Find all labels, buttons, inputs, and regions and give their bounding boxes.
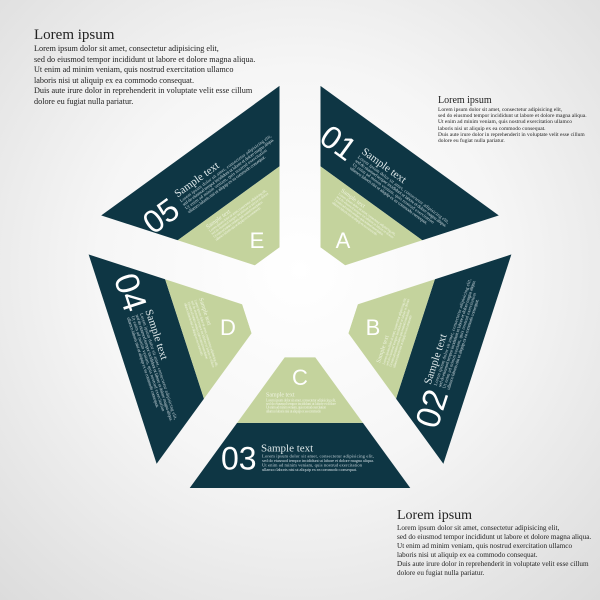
- text block: bottom-right: Lorem ipsum dolor sit amet, consectetur adipisicing elit,: [397, 524, 559, 532]
- text block: bottom-right: Duis aute irure dolor in reprehenderit in voluptate velit esse cillum: [397, 560, 589, 568]
- text block: top-left: Lorem ipsum dolor sit amet, consectetur adipisicing elit,: [34, 44, 219, 53]
- text block: top-right: [438, 95, 587, 144]
- wedge 05: [101, 86, 280, 266]
- wedge 05: Sample text: [172, 160, 222, 200]
- wedge 04: [88, 254, 252, 464]
- wedge 02: Sample text: [376, 335, 391, 364]
- text block: top-right: Ut enim ad minim veniam, quis nostrud exercitation ullamco: [438, 119, 572, 125]
- wedge 02: [348, 254, 512, 464]
- wedge 03: Sample text: [261, 442, 313, 454]
- wedge 02: Sample text: [422, 332, 450, 386]
- wedge 01: [320, 86, 499, 266]
- text block: top-left: sed do eiusmod tempor incididunt ut labore et dolore magna aliqua.: [34, 54, 255, 64]
- text block: bottom-right: [397, 508, 591, 577]
- text block: top-right: laboris nisi ut aliquip ex ea commodo consequat.: [438, 126, 546, 132]
- text block: top-right: dolore eu fugiat nulla pariatur.: [438, 138, 505, 144]
- text block: top-right: Lorem ipsum: [438, 95, 492, 106]
- wedge 05: Sample text: [205, 209, 232, 231]
- text block: bottom-right: Ut enim ad minim veniam, quis nostrud exercitation ullamco: [397, 542, 572, 550]
- wedge 01: A: [336, 228, 351, 253]
- text block: bottom-right: Lorem ipsum: [397, 508, 472, 523]
- text block: top-left: laboris nisi ut aliquip ex ea commodo consequat.: [34, 76, 194, 84]
- text block: top-right: Lorem ipsum dolor sit amet, consectetur adipisicing elit,: [438, 107, 562, 113]
- text block: bottom-right: sed do eiusmod tempor incididunt ut labore et dolore magna aliqua.: [397, 533, 591, 541]
- wedge 01: Sample text: [339, 188, 366, 210]
- wedge 04: 04: [106, 269, 154, 316]
- wedge 03: C: [292, 365, 308, 390]
- pentagon diagram: [88, 86, 512, 488]
- wedge 01: Sample text: [359, 146, 409, 186]
- text block: top-right: Duis aute irure dolor in reprehenderit in voluptate velit esse cillum: [438, 132, 585, 138]
- wedge 02: 02: [408, 385, 456, 433]
- text block: top-left: Ut enim ad minim veniam, quis nostrud exercitation ullamco: [34, 65, 233, 74]
- wedge 03: [190, 357, 410, 488]
- wedge 04: Sample text: [197, 297, 212, 327]
- text block: bottom-right: dolore eu fugiat nulla pariatur.: [397, 569, 484, 577]
- wedge 02: B: [366, 315, 380, 340]
- text block: top-left: Duis aute irure dolor in reprehenderit in voluptate velit esse cillum: [34, 86, 252, 95]
- wedge 01: 01: [313, 118, 363, 168]
- text block: top-left: [34, 27, 255, 106]
- text block: top-left: dolore eu fugiat nulla pariatur.: [34, 96, 133, 106]
- wedge 03: Sample text: [266, 392, 295, 398]
- text block: top-left: Lorem ipsum: [34, 27, 114, 43]
- text block: top-right: sed do eiusmod tempor incididunt ut labore et dolore magna aliqua.: [438, 113, 587, 119]
- wedge 05: 05: [136, 191, 186, 241]
- text block: bottom-right: laboris nisi ut aliquip ex ea commodo consequat.: [397, 551, 538, 559]
- wedge 03: 03: [221, 440, 257, 476]
- wedge 04: D: [220, 315, 236, 340]
- wedge 05: E: [250, 228, 264, 253]
- wedge 04: Sample text: [142, 308, 170, 361]
